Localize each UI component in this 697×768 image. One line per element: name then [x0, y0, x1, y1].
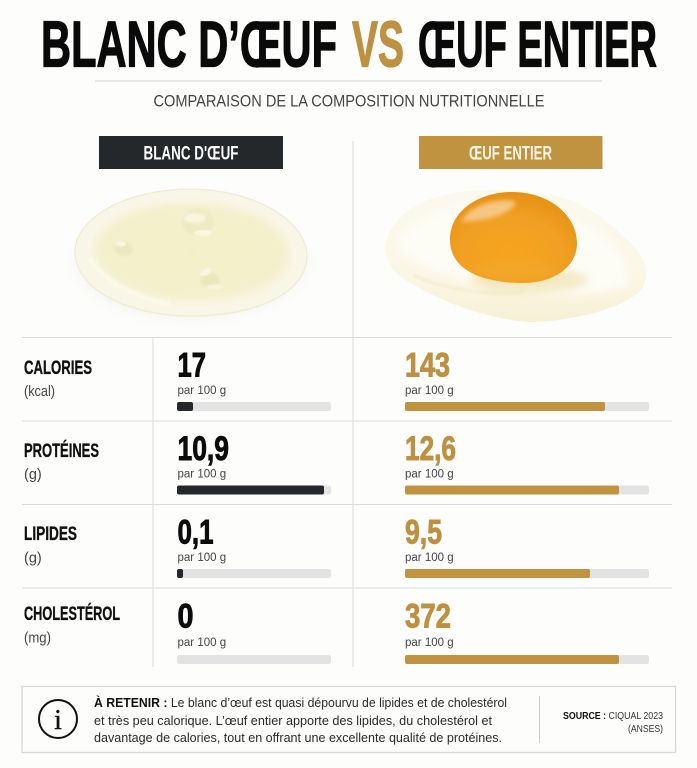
label: lipides: (g) — [24, 550, 42, 566]
label: lipides — [24, 523, 77, 566]
value: blanc 10,9: par 100 g — [178, 468, 226, 480]
bar: entier cholesterol — [405, 655, 649, 664]
source: SOURCE : CIQUAL 2023 — [563, 710, 663, 722]
source: (ANSES) — [628, 723, 663, 735]
label: cholesterol — [24, 602, 120, 646]
label: lipides: LIPIDES — [24, 523, 77, 545]
row: calories — [24, 346, 649, 411]
takeaway text — [94, 695, 507, 745]
column header: oeuf entier — [419, 136, 602, 169]
label: cholesterol: CHOLESTÉROL — [24, 602, 120, 625]
icon: info: i — [54, 705, 62, 736]
title: VS — [352, 8, 404, 80]
column header: blanc d'oeuf — [99, 136, 283, 169]
value: blanc 0 — [178, 598, 226, 649]
value: blanc 10,9: 10,9 — [178, 430, 229, 468]
illustration: egg white — [75, 189, 307, 318]
large bubble — [182, 208, 214, 236]
value: entier 143: 143 — [405, 346, 450, 384]
row: lipides — [24, 514, 649, 578]
value: entier 9,5: 9,5 — [405, 514, 442, 552]
label: calories: (kcal) — [24, 384, 55, 400]
value: entier 372: par 100 g — [405, 637, 454, 649]
row: proteines — [24, 430, 649, 494]
label: calories — [24, 357, 92, 400]
subtitle: COMPARAISON DE LA COMPOSITION NUTRITIONNELLE — [154, 92, 544, 110]
value: blanc 0: par 100 g — [178, 637, 226, 649]
takeaway text: et très peu calorique. L’œuf entier apporte des lipides, du cholestérol et — [94, 713, 492, 728]
value: blanc 0,1: 0,1 — [178, 514, 214, 552]
value: blanc 17: 17 — [178, 346, 206, 384]
bar: blanc lipides — [177, 569, 331, 578]
label: proteines: PROTÉINES — [24, 439, 99, 462]
value: entier 372: 372 — [405, 598, 451, 636]
label: calories: CALORIES — [24, 357, 92, 379]
column header: blanc d'oeuf: BLANC D'ŒUF — [144, 142, 239, 164]
bar: entier calories — [405, 402, 649, 411]
value: blanc 0: 0 — [178, 598, 194, 636]
small bubble — [115, 242, 133, 256]
bar: entier lipides — [405, 569, 649, 578]
source — [563, 710, 663, 735]
value: entier 12,6: 12,6 — [405, 430, 456, 468]
bar: entier proteines — [405, 486, 649, 494]
bar: blanc proteines — [177, 486, 331, 494]
label: cholesterol: (mg) — [24, 630, 51, 646]
value: blanc 0,1: par 100 g — [178, 552, 226, 564]
value: blanc 17: par 100 g — [178, 385, 226, 397]
value: blanc 17 — [178, 346, 226, 397]
value: entier 12,6 — [405, 430, 456, 480]
yolk — [450, 192, 577, 283]
bar: blanc cholesterol — [177, 655, 331, 664]
callout: a retenir — [22, 686, 676, 752]
label: proteines: (g) — [24, 467, 42, 483]
label: proteines — [24, 439, 99, 483]
takeaway text: davantage de calories, tout en offrant une excellente qualité de protéines. — [94, 730, 502, 745]
illustration: whole fried egg — [385, 190, 646, 322]
column header: oeuf entier: ŒUF ENTIER — [469, 142, 552, 164]
value: entier 143 — [405, 346, 454, 397]
bar: blanc calories — [177, 402, 331, 411]
title: BLANC D’ŒUF — [41, 8, 337, 80]
small bubble — [199, 267, 223, 290]
value: entier 12,6: par 100 g — [405, 468, 454, 480]
table rules — [22, 338, 672, 667]
takeaway text: À RETENIR : Le blanc d’œuf est quasi dépourvu de lipides et de cholestérol — [94, 695, 507, 710]
value: entier 372 — [405, 598, 454, 649]
value: entier 143: par 100 g — [405, 385, 454, 397]
value: entier 9,5: par 100 g — [405, 552, 454, 564]
row: cholesterol — [24, 598, 649, 664]
icon: info — [39, 700, 77, 738]
value: blanc 10,9 — [178, 430, 229, 480]
